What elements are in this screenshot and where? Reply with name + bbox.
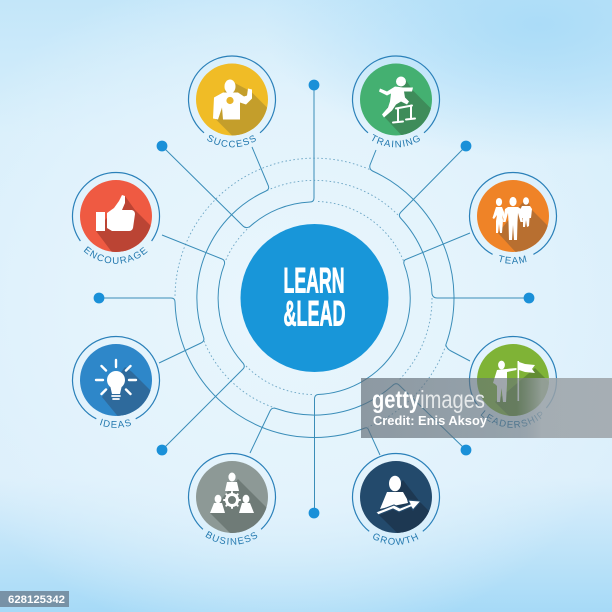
long shadow (216, 80, 267, 136)
icon: hurdler (379, 76, 415, 122)
badge: training (352, 55, 440, 148)
watermark credit: Credit: Enis Aksoy (373, 414, 487, 428)
long shadow (498, 197, 548, 252)
label: encourage: ENCOURAGE (84, 246, 148, 264)
badge: encourage (72, 172, 160, 264)
watermark logo: gettyimages (372, 386, 485, 414)
label: growth: GROWTH (373, 533, 418, 545)
image id tag: 628125342 (8, 594, 65, 606)
long shadow (102, 367, 150, 416)
icon: leader with flag (493, 361, 535, 402)
label: ideas: IDEAS (100, 418, 131, 428)
title: learn: LEARN (284, 262, 344, 300)
watermark panel (361, 378, 612, 438)
icon: light bulb (96, 360, 136, 399)
long shadow (96, 196, 151, 252)
badge: team (468, 172, 558, 264)
central circle with title (240, 224, 388, 372)
badge: business (188, 452, 276, 545)
label: business: BUSINESS (206, 531, 258, 545)
connector network (99, 85, 529, 513)
label: training: TRAINING (372, 134, 420, 148)
badge: ideas (72, 336, 160, 428)
icon: reader with rising arrow (376, 476, 421, 515)
icon: three people (492, 197, 532, 240)
icon: thumbs up (96, 195, 135, 231)
title: and lead: &LEAD (284, 294, 346, 334)
label: team: TEAM (499, 255, 526, 264)
long shadow (496, 368, 545, 416)
badge: leadership (468, 336, 558, 428)
long shadow (379, 480, 429, 533)
long shadow (210, 479, 266, 533)
badge: growth (352, 452, 440, 545)
image id tag (0, 591, 69, 607)
connector end dots (94, 80, 534, 518)
label: leadership: LEADERSHIP (480, 410, 542, 428)
icon: team around gear (210, 472, 254, 513)
badge: success (188, 55, 276, 148)
icon: medal winner (213, 80, 252, 120)
long shadow (384, 80, 431, 135)
label: success: SUCCESS (207, 135, 256, 148)
